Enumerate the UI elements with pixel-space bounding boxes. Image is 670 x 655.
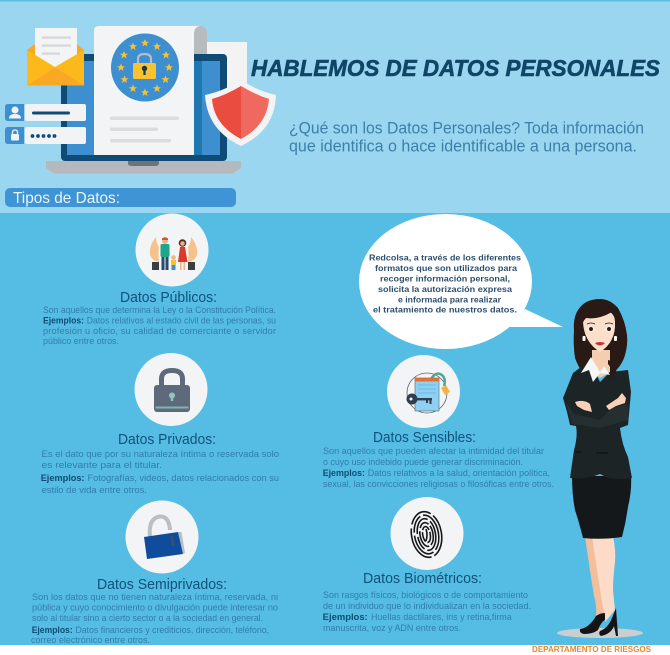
description: pública y cuyo conocimiento o divulgación puede interesar no [32, 602, 278, 612]
icon: key and document [387, 355, 460, 428]
description [323, 446, 554, 489]
icon: username field [5, 104, 86, 121]
description: Huellas dactilares, iris y retina,firma [371, 612, 513, 622]
description: Ejemplos: [323, 468, 365, 478]
shoes [580, 608, 618, 636]
illustration: laptop with privacy document [46, 26, 247, 174]
panel: datos publicos [43, 214, 276, 346]
description: profesión u oficio, su calidad de comerciante o servidor [43, 326, 276, 336]
icon: closed padlock [134, 353, 208, 426]
callout: speech bubble: formatos que son utilizados para [375, 263, 517, 273]
top edge strip [0, 0, 670, 2]
description: Es el dato que por su naturaleza íntima o reservada solo [42, 449, 279, 459]
laptop screen [61, 54, 227, 161]
face [581, 303, 619, 352]
callout: speech bubble [359, 214, 563, 349]
description: sexual, las convicciones religiosas o filosóficas entre otros. [323, 479, 554, 489]
title: HABLEMOS DE DATOS PERSONALES [251, 55, 660, 81]
footer label: DEPARTAMENTO DE RIESGOS [532, 645, 652, 654]
description: público entre otros. [43, 336, 119, 346]
heading: Datos Sensibles: [373, 429, 476, 446]
icon: fingerprint [390, 497, 464, 570]
heading: Datos Biométricos: [363, 570, 482, 587]
heading: Datos Privados: [118, 431, 216, 448]
pockets [575, 452, 608, 453]
description [43, 305, 276, 346]
panel: datos privados [41, 353, 279, 495]
callout: speech bubble: e informada para realizar [398, 295, 502, 305]
description: Ejemplos: [41, 473, 84, 483]
description: Fotografías, videos, datos relacionados con su [88, 473, 279, 483]
callout: speech bubble: el tratamiento de nuestros datos. [373, 305, 517, 315]
jacket [563, 362, 632, 479]
heading: Datos Semiprivados: [97, 576, 227, 593]
description: de un individuo que lo individualizan en la sociedad. [323, 601, 531, 611]
intro text [289, 120, 644, 156]
description [31, 592, 278, 645]
crossed arms [566, 393, 628, 428]
laptop base [46, 161, 241, 174]
section bar: tipos de datos [5, 188, 236, 207]
collar [581, 357, 610, 382]
intro text: que identifica o hace identificable a una persona. [289, 138, 637, 156]
description: manuscrita, voz y ADN entre otros. [323, 623, 461, 633]
description: correo electrónico entre otros. [31, 635, 150, 645]
description: Ejemplos: [323, 612, 368, 622]
legs [585, 536, 615, 622]
icon: family protected by hands [136, 214, 208, 286]
panel: datos biometricos [323, 497, 531, 633]
neck [592, 350, 610, 378]
icon: shield [205, 80, 276, 146]
panel: datos semiprivados [31, 500, 278, 645]
callout: speech bubble: recoger información personal, [380, 274, 510, 284]
description: es relevante para el titular. [42, 460, 162, 470]
hair back [574, 299, 627, 374]
description: Datos relativos al estado civil de las personas, su [87, 316, 276, 326]
section bar: tipos de datos: Tipos de Datos: [13, 190, 120, 207]
description [323, 590, 531, 633]
intro text: ¿Qué son los Datos Personales? Toda información [289, 120, 644, 138]
icon: envelope [27, 28, 84, 86]
description: Son aquellos que determina la Ley o la Constitución Política. [43, 305, 276, 315]
description: Datos financieros y crediticios, dirección, teléfono, [76, 625, 269, 635]
callout: speech bubble: solicita la autorización expresa [378, 284, 512, 294]
description: estilo de vida entre otros. [42, 485, 147, 495]
description: Ejemplos: [32, 625, 73, 635]
back page [207, 42, 247, 92]
description: o cuyo uso indebido puede generar discriminación. [323, 457, 523, 467]
skirt [572, 476, 631, 539]
panel: datos sensibles [323, 355, 554, 489]
description: Son rasgos físicos, biológicos o de comportamiento [323, 590, 528, 600]
illustration: businesswoman [557, 299, 643, 638]
callout: speech bubble: Redcolsa, a través de los diferentes [369, 253, 521, 263]
description: Son aquellos que pueden afectar la intimidad del titular [323, 446, 544, 456]
hair strand over shoulder [608, 360, 616, 377]
description [41, 449, 279, 495]
document [94, 26, 207, 155]
icon: password field [5, 127, 86, 144]
icon: open padlock [126, 500, 198, 574]
heading: Datos Públicos: [120, 289, 217, 306]
description: Datos relativos a la salud, orientación política, [368, 468, 550, 478]
main panel background [0, 213, 670, 645]
description: solo al titular sino a cierto sector o a la sociedad en general. [32, 613, 263, 623]
description: Ejemplos: [43, 316, 84, 326]
header background [0, 0, 670, 213]
floor shadow [557, 628, 643, 638]
EU seal with padlock [111, 34, 179, 102]
description: Son los datos que no tienen naturaleza íntima, reservada, ni [32, 592, 278, 602]
